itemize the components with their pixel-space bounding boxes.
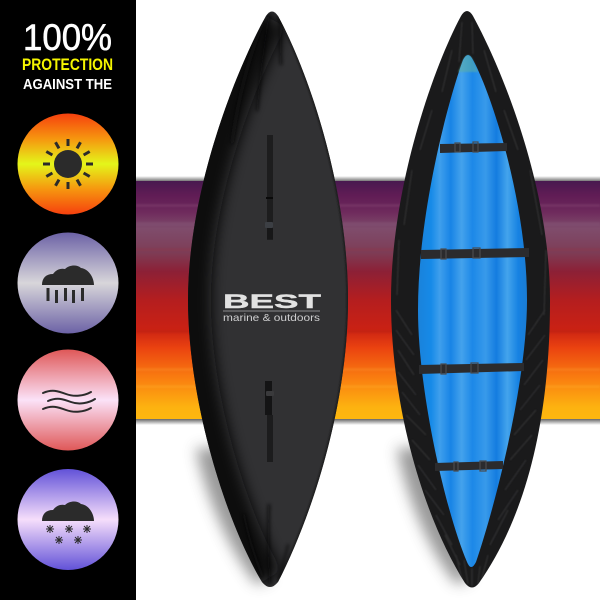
logo: BEST marine & outdoors: marine & outdoors bbox=[223, 312, 320, 324]
sunset band bbox=[136, 176, 600, 425]
blue hull bbox=[418, 55, 527, 567]
icon: wind bbox=[18, 350, 118, 450]
headline: protection: PROTECTION bbox=[22, 56, 113, 74]
strap: upper bbox=[265, 135, 273, 240]
logo: BEST marine & outdoors: BEST bbox=[223, 291, 321, 313]
hull straps bbox=[419, 142, 529, 471]
strap: lower bbox=[265, 381, 274, 462]
kayak: cover underside view bbox=[391, 11, 550, 588]
icon: sun bbox=[18, 114, 118, 214]
logo: BEST marine & outdoors bbox=[223, 291, 321, 324]
icon: snow cloud bbox=[18, 469, 118, 570]
kayak: cover top view bbox=[188, 12, 348, 587]
left sidebar bbox=[0, 0, 136, 600]
headline: 100%: 100% bbox=[23, 17, 112, 58]
headline: against the: AGAINST THE bbox=[23, 76, 112, 93]
icon: rain cloud bbox=[18, 232, 118, 334]
kayak ground shadows bbox=[196, 448, 470, 584]
